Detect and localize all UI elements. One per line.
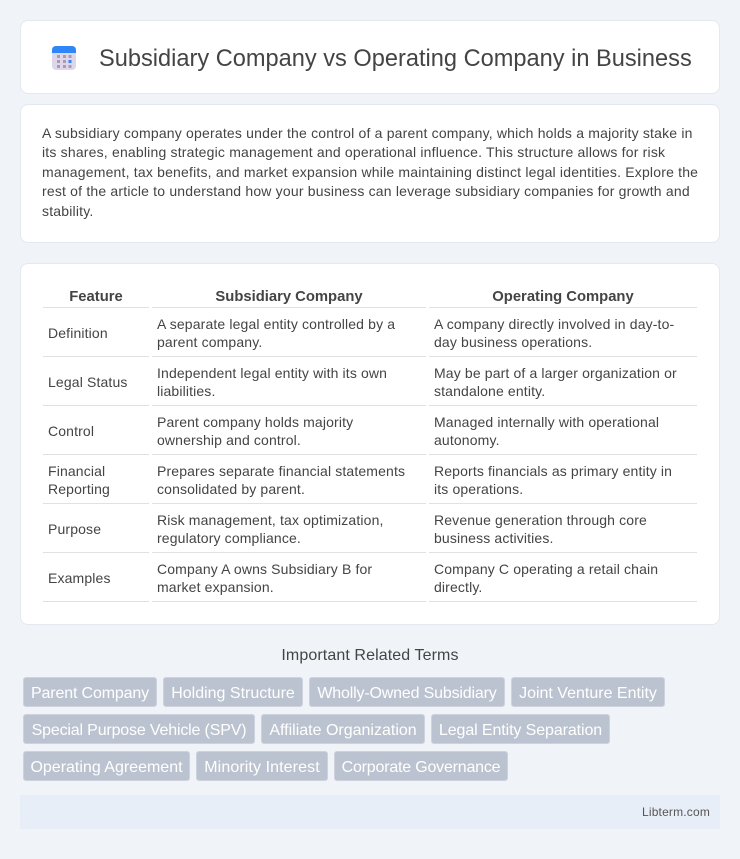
tag [334, 751, 508, 781]
tag [23, 677, 157, 707]
row: control: autonomy. [434, 432, 500, 448]
row: examples: directly. [434, 579, 482, 595]
row: definition [48, 316, 674, 350]
tag: Operating Agreement [30, 759, 183, 776]
row: purpose: business activities. [434, 530, 554, 546]
tag: Parent Company [31, 685, 149, 702]
tag [511, 677, 665, 707]
intro text: management, tax benefits, and market expansion while maintaining distinct legal identities. Explore the [42, 164, 698, 180]
row: control: Managed internally with operational [434, 414, 659, 430]
table header: Subsidiary Company [215, 289, 363, 305]
row: definition: Definition [48, 325, 108, 341]
tag [309, 677, 505, 707]
row: examples [48, 561, 658, 595]
row: control: Control [48, 423, 94, 439]
intro text: rest of the article to understand how your business can leverage subsidiary companies for growth and [42, 183, 690, 199]
row: control: Parent company holds majority [157, 414, 353, 430]
footer source text: Libterm.com [642, 805, 710, 819]
row: definition: parent company. [157, 334, 262, 350]
row: financial reporting: its operations. [434, 481, 523, 497]
row: purpose: Revenue generation through core [434, 512, 647, 528]
row: financial reporting: Prepares separate financial statements [157, 463, 405, 479]
panel: comparison table [20, 263, 720, 625]
related term tags [23, 677, 665, 781]
row: purpose: regulatory compliance. [157, 530, 301, 546]
related terms heading: Important Related Terms [281, 647, 459, 664]
row: legal status: Legal Status [48, 374, 128, 390]
tag [163, 677, 303, 707]
intro text: A subsidiary company operates under the control of a parent company, which holds a majority stake in [42, 125, 693, 141]
row: legal status: liabilities. [157, 383, 215, 399]
tag: Special Purpose Vehicle (SPV) [32, 722, 246, 739]
row: financial reporting: Reports financials as primary entity in [434, 463, 672, 479]
row: definition: day business operations. [434, 334, 592, 350]
row: financial reporting: consolidated by parent. [157, 481, 305, 497]
row: examples: Company A owns Subsidiary B for [157, 561, 372, 577]
tag: Holding Structure [171, 685, 295, 702]
tag: Affiliate Organization [269, 722, 417, 739]
row: financial reporting [48, 463, 672, 497]
row: definition: A company directly involved in day-to- [434, 316, 674, 332]
title: Subsidiary Company vs Operating Company in Business [99, 46, 692, 72]
intro text [42, 125, 698, 219]
tag [196, 751, 328, 781]
row: legal status: Independent legal entity with its own [157, 365, 387, 381]
row: purpose: Risk management, tax optimization, [157, 512, 384, 528]
intro text: stability. [42, 203, 93, 219]
table header [69, 289, 634, 305]
row: financial reporting: Reporting [48, 481, 110, 497]
tag: Legal Entity Separation [439, 722, 602, 739]
table header: Feature [69, 289, 123, 305]
row: purpose: Purpose [48, 521, 101, 537]
row: purpose [48, 512, 647, 546]
row: examples: Company C operating a retail chain [434, 561, 658, 577]
tag [23, 714, 255, 744]
row: financial reporting: Financial [48, 463, 105, 479]
tag [23, 751, 190, 781]
row: examples: market expansion. [157, 579, 274, 595]
tag: Wholly-Owned Subsidiary [317, 685, 497, 702]
tag: Corporate Governance [342, 759, 500, 776]
row: legal status: May be part of a larger organization or [434, 365, 677, 381]
icon: calendar [52, 46, 76, 70]
row: definition: A separate legal entity controlled by a [157, 316, 395, 332]
intro text: its shares, enabling strategic management and operational influence. This structure allows for risk [42, 144, 665, 160]
row: examples: Examples [48, 570, 111, 586]
panel: introduction [20, 104, 720, 243]
row: control [48, 414, 659, 448]
tag: Minority Interest [204, 759, 320, 776]
row: control: ownership and control. [157, 432, 301, 448]
tag [261, 714, 425, 744]
table header: Operating Company [492, 289, 634, 305]
tag: Joint Venture Entity [519, 685, 657, 702]
header panel [20, 20, 720, 94]
row: legal status [48, 365, 677, 399]
tag [431, 714, 610, 744]
footer bar [20, 795, 720, 829]
row: legal status: standalone entity. [434, 383, 545, 399]
